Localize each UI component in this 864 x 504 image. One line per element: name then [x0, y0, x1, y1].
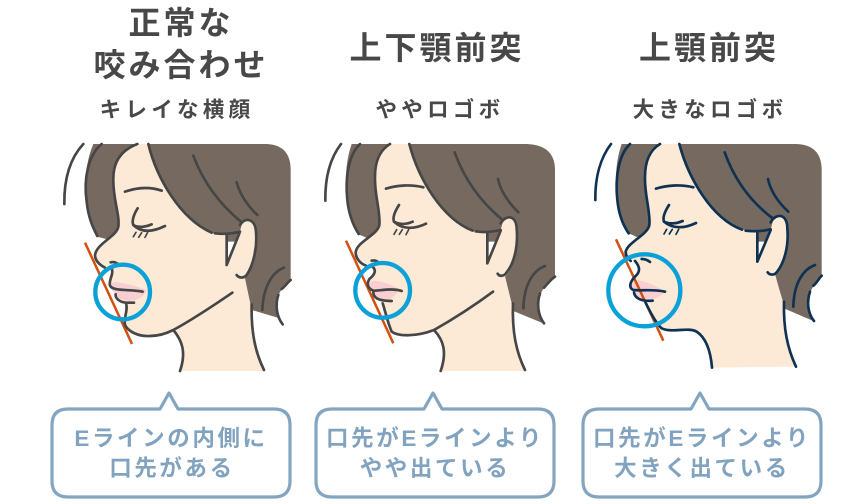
highlight circle — [355, 263, 410, 318]
E-line — [346, 241, 393, 343]
heading: maxillary protrusion: 上顎前突 — [639, 30, 779, 66]
callout: slight protrusion — [316, 393, 554, 497]
illustration: normal profile — [64, 144, 291, 371]
E-line — [616, 239, 663, 341]
highlight circle — [95, 265, 150, 319]
heading: maxillary protrusion — [633, 30, 787, 122]
callout: slight protrusion: 口先がEラインより — [326, 425, 544, 451]
callout: large protrusion — [583, 393, 821, 497]
heading: bimaxillary protrusion: 上下顎前突 — [349, 30, 525, 66]
heading: normal bite — [93, 5, 269, 122]
heading: maxillary protrusion: 大きなロゴボ — [633, 97, 787, 122]
E-line — [85, 243, 132, 344]
heading: bimaxillary protrusion: ややロゴボ — [375, 97, 505, 122]
heading: bimaxillary protrusion — [349, 30, 525, 122]
callout: normal — [52, 393, 290, 497]
callout: normal: 口先がある — [109, 455, 235, 481]
callout: large protrusion: 大きく出ている — [614, 456, 790, 481]
illustration: large protrusion — [595, 144, 822, 368]
illustration: slight protrusion — [325, 144, 555, 371]
heading: normal bite: 正常な — [128, 5, 234, 41]
heading: normal bite: 咬み合わせ — [93, 47, 269, 83]
highlight circle — [608, 254, 680, 326]
callout: slight protrusion: やや出ている — [360, 456, 510, 481]
callout: large protrusion: 口先がEラインより — [593, 425, 811, 451]
callout: normal: Eラインの内側に — [74, 426, 268, 451]
heading: normal bite: キレイな横顔 — [100, 98, 254, 122]
